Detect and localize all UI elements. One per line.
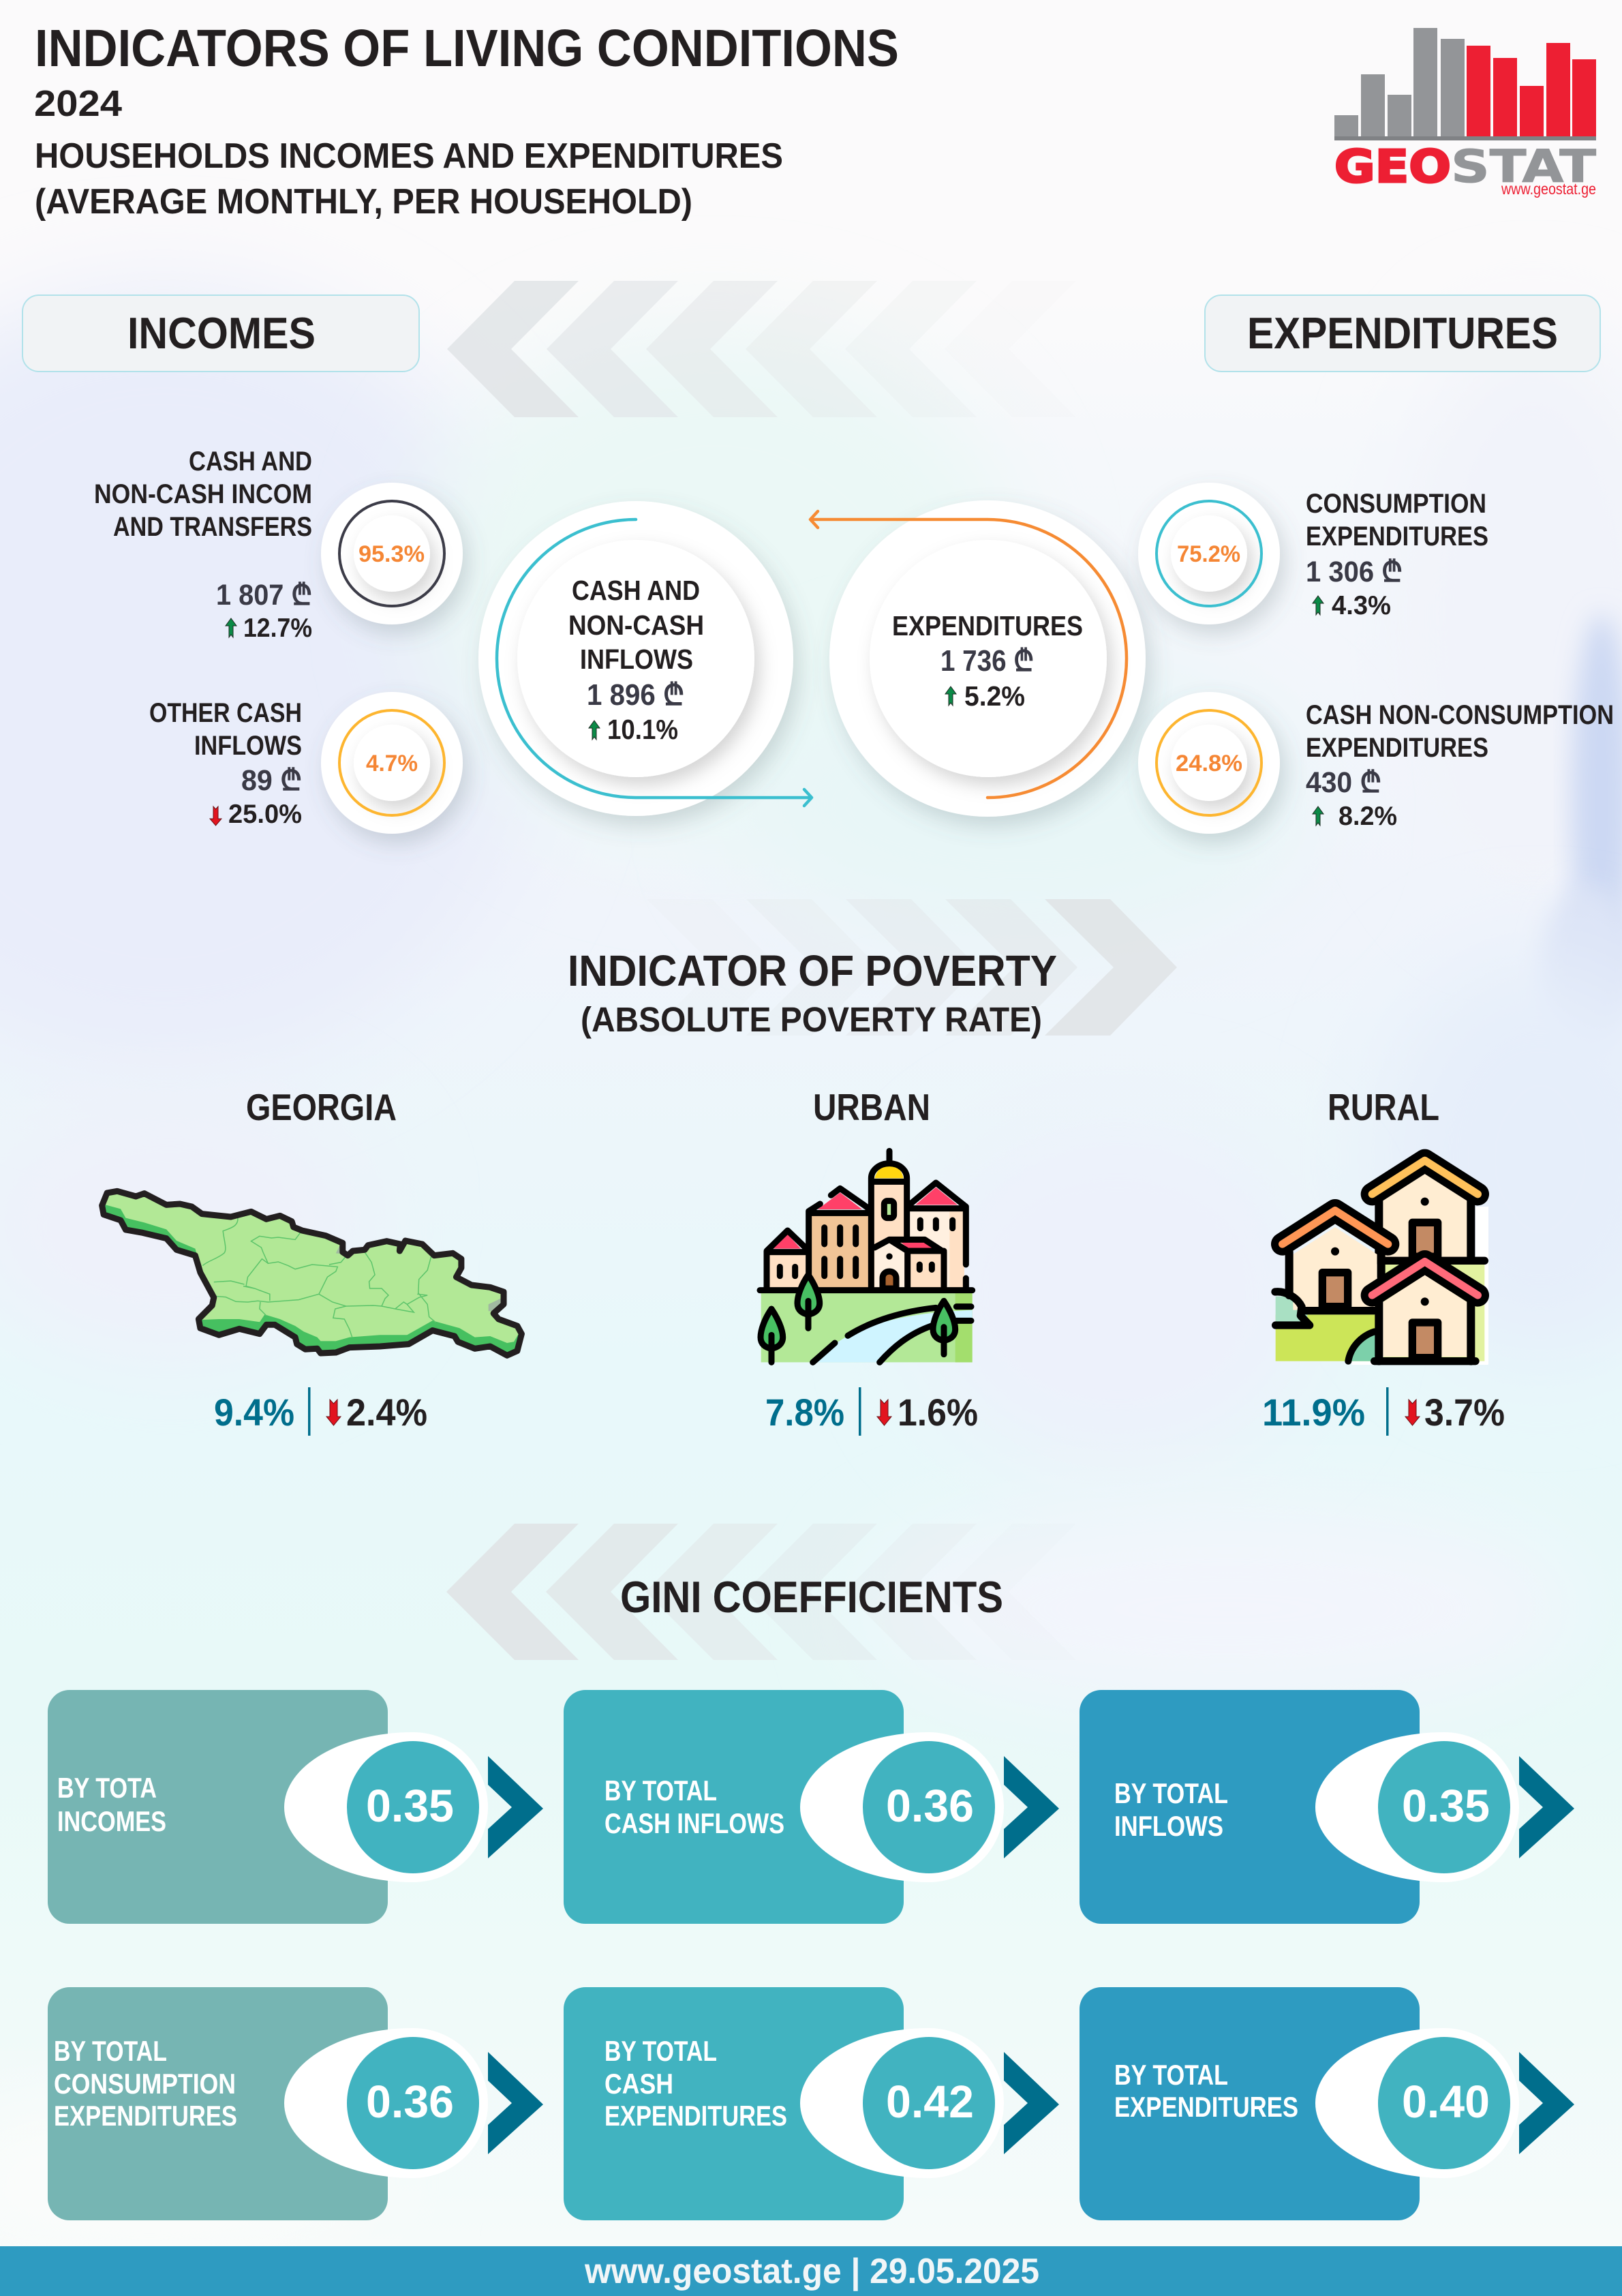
- panel: consumption expenditures label: [1306, 489, 1488, 620]
- left house: [1283, 1211, 1388, 1311]
- panel: cash and non-cash income label: [94, 447, 312, 643]
- logo: Geostat: GEO: [1334, 140, 1451, 193]
- decorative chevrons: incomes to expenditures: [447, 281, 1076, 417]
- circle: 24.8% share: [1138, 692, 1280, 834]
- card: by total cash expenditures: BY TOTAL: [605, 2035, 717, 2067]
- panel: urban poverty: [760, 1086, 978, 1436]
- card: by total incomes: INCOMES: [57, 1805, 166, 1837]
- card: by total cash inflows: CASH INFLOWS: [605, 1807, 784, 1839]
- front house: [1372, 1262, 1478, 1361]
- back house: [1372, 1160, 1484, 1260]
- circle: 4.7% share: [321, 692, 463, 834]
- decorative chevrons: gini section: [446, 1524, 1076, 1660]
- panel: cash non-consumption expenditures label: 8.2%: [1338, 802, 1397, 831]
- panel: consumption expenditures label: EXPENDITURES: [1306, 522, 1488, 552]
- logo: Geostat: STAT: [1451, 140, 1596, 193]
- heading: urban: URBAN: [813, 1086, 930, 1128]
- decorative chevrons: poverty section: [647, 899, 1177, 1036]
- card: by total cash expenditures: 0.42: [886, 2076, 974, 2128]
- stat: Georgia rate: 9.4%: [214, 1391, 294, 1434]
- circle: cash and non-cash inflows: CASH AND: [572, 575, 700, 606]
- circle: cash and non-cash inflows: INFLOWS: [580, 644, 693, 675]
- circle: cash and non-cash inflows: NON-CASH: [568, 609, 704, 641]
- heading: indicator of poverty: [568, 946, 1057, 1039]
- panel: expenditures heading: [1205, 295, 1600, 372]
- card: by total incomes: [48, 1690, 543, 1924]
- circle: cash and non-cash inflows: 10.1%: [607, 714, 678, 745]
- card: by total consumption expenditures: CONSUMPTION: [54, 2068, 236, 2100]
- card: by total consumption expenditures: [48, 1987, 543, 2220]
- card: by total expenditures: [1080, 1987, 1574, 2220]
- stat: Georgia rate: [214, 1387, 427, 1436]
- card: by total cash expenditures: CASH: [605, 2068, 673, 2100]
- logo: Geostat: [1334, 28, 1596, 198]
- circle: 95.3% share: 95.3%: [358, 541, 425, 567]
- card: by total inflows: [1080, 1690, 1574, 1924]
- card: by total consumption expenditures: BY TOTAL: [54, 2035, 167, 2067]
- heading: indicator of poverty: INDICATOR OF POVERTY: [568, 946, 1057, 995]
- panel: expenditures heading: EXPENDITURES: [1247, 308, 1558, 358]
- icon: village houses: [1275, 1160, 1488, 1365]
- card: by total cash expenditures: EXPENDITURES: [605, 2100, 787, 2132]
- panel: incomes heading: [22, 295, 419, 372]
- circle: 95.3% share: [321, 483, 463, 624]
- panel: other cash inflows label: INFLOWS: [194, 731, 302, 761]
- subtitle line 2: (AVERAGE MONTHLY, PER HOUSEHOLD): [35, 182, 692, 222]
- card: by total expenditures: BY TOTAL: [1114, 2059, 1228, 2091]
- stat: rural rate: [1262, 1387, 1505, 1436]
- panel: other cash inflows label: 25.0%: [228, 800, 302, 829]
- footer: www.geostat.ge | 29.05.2025: [584, 2252, 1039, 2291]
- card: by total incomes: 0.35: [366, 1781, 454, 1832]
- card: by total expenditures: 0.40: [1402, 2076, 1490, 2128]
- card: by total consumption expenditures: EXPENDITURES: [54, 2100, 237, 2132]
- title block: [34, 19, 899, 222]
- panel: Georgia poverty: [102, 1086, 521, 1436]
- heading: rural: RURAL: [1328, 1086, 1439, 1128]
- icon: town: [760, 1151, 973, 1362]
- panel: other cash inflows label: [149, 698, 302, 829]
- panel: consumption expenditures label: 4.3%: [1332, 591, 1391, 620]
- card: by total incomes: BY TOTA: [57, 1772, 157, 1804]
- heading: gini coefficients: GINI COEFFICIENTS: [620, 1572, 1003, 1622]
- main title: INDICATORS OF LIVING CONDITIONS: [35, 19, 899, 78]
- card: by total consumption expenditures: 0.36: [366, 2076, 454, 2128]
- circle: expenditures: 1 736 ₾: [940, 644, 1034, 678]
- card: by total cash expenditures: [564, 1987, 1059, 2220]
- footer: [0, 2246, 1622, 2296]
- stat: Georgia rate: 2.4%: [346, 1391, 427, 1434]
- card: by total cash inflows: [564, 1690, 1059, 1924]
- panel: other cash inflows label: 89 ₾: [241, 764, 302, 797]
- stat: rural rate: 11.9%: [1262, 1391, 1365, 1434]
- panel: cash and non-cash income label: 1 807 ₾: [216, 579, 312, 611]
- subtitle line 1: HOUSEHOLDS INCOMES AND EXPENDITURES: [35, 136, 783, 176]
- stat: urban rate: [765, 1387, 978, 1436]
- arrow: expenditures to inflows: [810, 511, 1127, 798]
- circle: 4.7% share: 4.7%: [366, 751, 418, 776]
- card: by total inflows: 0.35: [1402, 1781, 1490, 1832]
- panel: other cash inflows label: OTHER CASH: [149, 698, 302, 728]
- panel: cash non-consumption expenditures label: 430 ₾: [1306, 766, 1381, 799]
- icon: map of Georgia: [102, 1191, 521, 1355]
- circle: 24.8% share: 24.8%: [1176, 751, 1242, 776]
- year: 2024: [34, 83, 122, 124]
- stat: rural rate: 3.7%: [1424, 1391, 1505, 1434]
- circle: expenditures: EXPENDITURES: [892, 610, 1083, 641]
- stat: urban rate: 1.6%: [898, 1391, 978, 1434]
- panel: incomes heading: INCOMES: [127, 308, 316, 358]
- card: by total cash inflows: BY TOTAL: [605, 1774, 717, 1807]
- panel: cash non-consumption expenditures label: EXPENDITURES: [1306, 733, 1488, 763]
- logo: Geostat: www.geostat.ge: [1501, 180, 1596, 198]
- card: by total cash inflows: 0.36: [886, 1781, 974, 1832]
- panel: cash and non-cash income label: 12.7%: [243, 614, 312, 643]
- panel: cash non-consumption expenditures label: [1306, 700, 1614, 831]
- panel: cash and non-cash income label: CASH AND: [189, 447, 312, 477]
- card: by total inflows: INFLOWS: [1114, 1810, 1223, 1842]
- panel: consumption expenditures label: 1 306 ₾: [1306, 556, 1403, 588]
- circle: cash and non-cash inflows: [478, 501, 793, 816]
- circle: expenditures: 5.2%: [964, 680, 1025, 712]
- heading: Georgia: GEORGIA: [246, 1086, 397, 1128]
- circle: cash and non-cash inflows: 1 896 ₾: [587, 678, 684, 712]
- panel: cash and non-cash income label: NON-CASH INCOM: [94, 479, 312, 509]
- panel: consumption expenditures label: CONSUMPTION: [1306, 489, 1486, 519]
- circle: expenditures: [829, 500, 1146, 817]
- heading: indicator of poverty: (ABSOLUTE POVERTY RATE): [581, 1000, 1042, 1039]
- arrow: inflows to expenditures: [497, 519, 812, 806]
- circle: 75.2% share: 75.2%: [1177, 541, 1240, 567]
- circle: 75.2% share: [1138, 483, 1280, 624]
- card: by total inflows: BY TOTAL: [1114, 1777, 1228, 1809]
- card: by total expenditures: EXPENDITURES: [1114, 2091, 1298, 2123]
- panel: cash and non-cash income label: AND TRANSFERS: [113, 512, 312, 542]
- panel: rural poverty: [1262, 1086, 1505, 1436]
- stat: urban rate: 7.8%: [765, 1391, 844, 1434]
